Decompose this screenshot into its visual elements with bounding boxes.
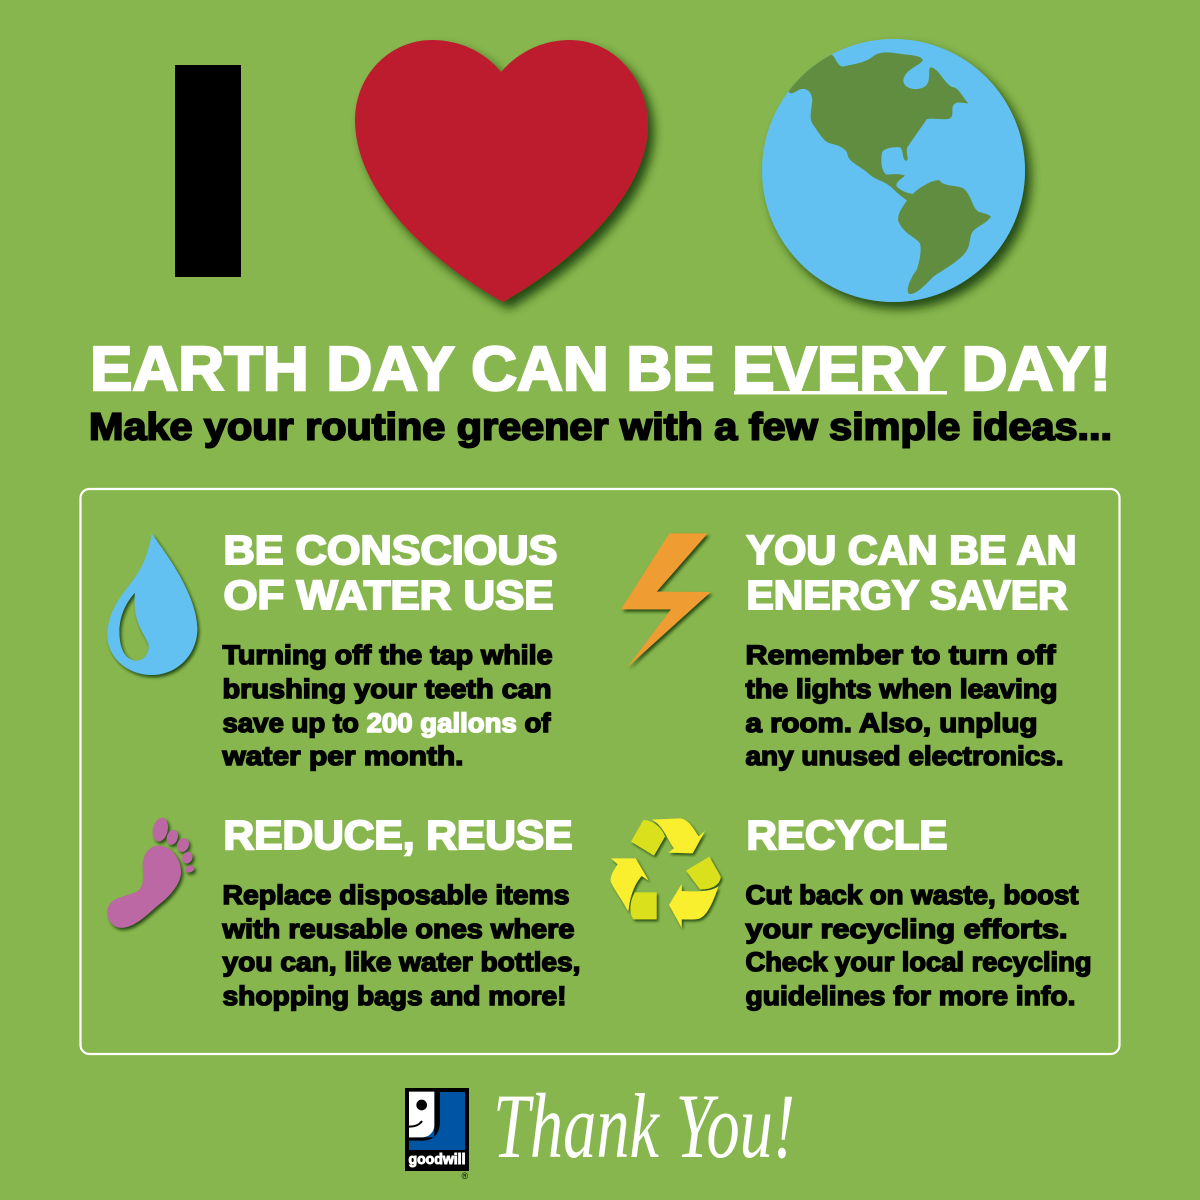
tip: water use: Turning off the tap while [222, 640, 552, 670]
letter I [175, 65, 241, 277]
icon: red heart [355, 40, 648, 302]
tip: energy saver: the lights when leaving [746, 674, 1058, 704]
logo: goodwill: goodwill [408, 1152, 466, 1168]
tip: water use [221, 527, 558, 771]
tip: water use: brushing your teeth can [222, 674, 552, 704]
logo: goodwill: ® [462, 1171, 468, 1181]
tip: reduce, reuse: you can, like water bottles, [222, 947, 580, 977]
tip: reduce, reuse [221, 812, 580, 1011]
tip: recycle: Check your local recycling [746, 947, 1092, 977]
subtitle: Make your routine greener with a few simple ideas... [89, 406, 1112, 448]
tip: recycle [746, 812, 1092, 1011]
panel: tips box [80, 489, 1120, 1054]
tip: energy saver: any unused electronics. [746, 741, 1064, 771]
tip: recycle: Cut back on waste, boost [746, 880, 1079, 910]
tip: reduce, reuse: Replace disposable items [222, 880, 570, 910]
icon: earth globe [762, 39, 1025, 302]
tip: recycle: RECYCLE [746, 812, 948, 858]
tip: water use: BE CONSCIOUS [224, 527, 558, 573]
tip: energy saver [746, 527, 1076, 771]
tip: reduce, reuse: with reusable ones where [221, 914, 574, 944]
icon: footprint [107, 816, 195, 928]
tip: reduce, reuse: shopping bags and more! [222, 981, 566, 1011]
logo: goodwill [405, 1088, 469, 1181]
tip: water use: save up to 200 gallons of [222, 708, 551, 738]
icon: lightning bolt [621, 533, 711, 667]
tip: water use: water per month. [221, 741, 464, 771]
tip: water use: OF WATER USE [224, 572, 554, 618]
tip: recycle: your recycling efforts. [746, 914, 1068, 944]
tip: energy saver: a room. Also, unplug [746, 708, 1038, 738]
tip: reduce, reuse: REDUCE, REUSE [224, 812, 572, 858]
tip: energy saver: Remember to turn off [746, 640, 1056, 670]
icon: recycling arrows [611, 818, 721, 928]
title: EARTH DAY CAN BE EVERY DAY! [90, 335, 1111, 404]
icon: water drop [107, 533, 197, 675]
tip: energy saver: YOU CAN BE AN [746, 527, 1076, 573]
tip: recycle: guidelines for more info. [746, 981, 1076, 1011]
thank you script: Thank You! [493, 1075, 795, 1177]
tip: energy saver: ENERGY SAVER [746, 572, 1068, 618]
